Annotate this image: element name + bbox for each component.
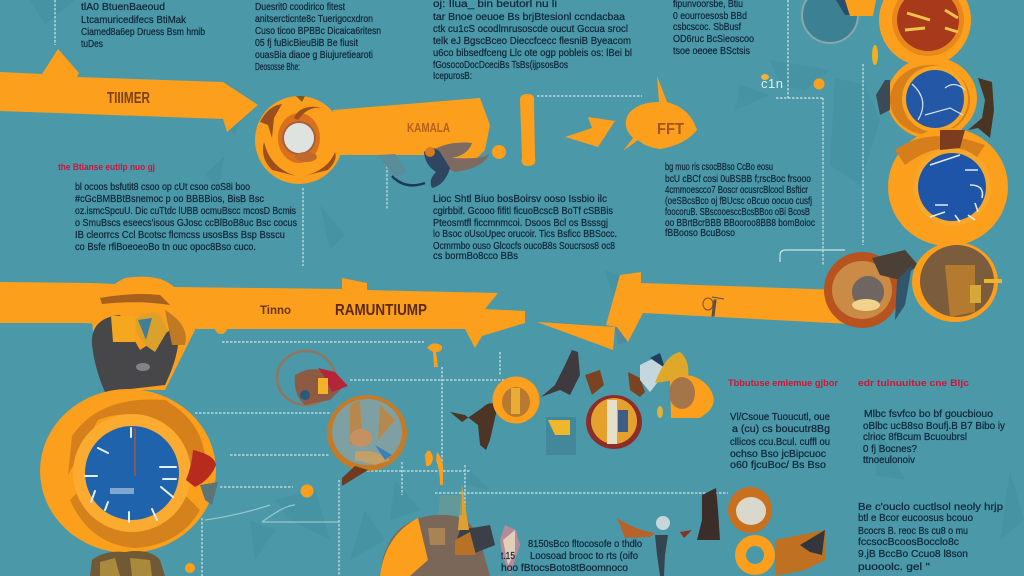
text: top second: Deososse Bhe:	[255, 62, 300, 73]
text: lower right one	[730, 412, 830, 471]
small ring glyphs: c1n	[761, 76, 783, 91]
text: lower right one: a (cu) cs boucutr8Bg	[732, 424, 830, 435]
text: top second	[255, 2, 381, 73]
red leaf	[186, 450, 216, 487]
arrow band: top left	[0, 49, 258, 132]
text: lower right three: 9.jB BccBo Ccuo8 l8son	[858, 549, 968, 560]
text: top third	[433, 0, 632, 82]
figure: person with tool	[450, 403, 498, 450]
text: top fourth	[673, 0, 754, 57]
text: top third: fGosocoDocDceciBs TsBs(ijpsosBos	[433, 60, 568, 71]
dancers group	[541, 350, 665, 455]
small ring figure	[277, 351, 348, 405]
dotted connector lines	[55, 0, 863, 576]
text: middle centre	[433, 194, 617, 262]
red clock top	[872, 0, 971, 66]
swatch person bottom	[500, 525, 520, 575]
text: top fourth: OD6ruc BcSieoscoo	[673, 34, 754, 45]
text: lower right two: clrioc 8fBcum Bcuoubrsl	[863, 432, 967, 443]
text: top second: 05 fj fuBicBieuBiB Be fiusit	[255, 38, 358, 49]
red heading: lower right two: edr tulnuuitue cne Bljc	[858, 378, 969, 389]
text: top fourth: csbcscoc. SbBusf	[673, 22, 741, 33]
vase figure above big clock	[92, 277, 195, 392]
text: lower right three: Be c'ouclo cuctlsol neoly hrjp	[858, 502, 1003, 513]
text: middle right: bcU cBCf cosi 0uBSBB f;rscBoc frsooo	[665, 174, 811, 185]
arrow band: lower right	[537, 272, 850, 350]
large brown globe bottom	[380, 485, 495, 576]
blue clock large	[888, 128, 1008, 246]
text: middle right: fBBooso BcuBoso	[665, 228, 735, 239]
text: middle centre: Lioc Shtl Biuo bosBoirsv ooso Issbio ilc	[433, 194, 607, 205]
heading: lower band large: RAMUNTIUMP	[335, 302, 427, 319]
chevron arrow	[565, 117, 615, 147]
text: lower right one: Vl/Csoue Tuoucutl, oue	[730, 412, 830, 423]
text: top third: ctk cu1cS ocodlmrusoscde oucut Gccua srocl	[433, 24, 628, 35]
text: lower right two: oBlbc ucB8so Boufj.B B7 Bibo iy	[863, 421, 1005, 432]
text: middle centre: Pteosmtfl ficcmnmcoi. Dsoos Bcl os Bsssgj	[433, 218, 608, 229]
red rim medallion	[586, 395, 642, 449]
text: lower right two	[863, 409, 1005, 466]
text: lower right three: Bcocrs B. reoc Bs cu8 o mu	[858, 526, 968, 537]
right clock stack	[802, 0, 1008, 328]
text: lower right two: 0 fj Bocnes?	[863, 444, 917, 455]
label inside bubble: FFT	[657, 121, 684, 138]
text: lower right one: ochso Bso jcBipcuoc	[730, 449, 826, 460]
watch dial	[260, 96, 336, 176]
small orange dot	[492, 145, 506, 159]
text: top left: tuDes	[81, 39, 103, 50]
text: middle left	[75, 182, 297, 253]
small mechanical clock	[327, 395, 407, 486]
text: lower right three: puooolc. gel ''	[858, 562, 930, 573]
heading: middle band: KAMALA	[407, 120, 450, 135]
text: middle right: 4cmmoescco7 Boscr ocusrcBlcocl Bsfticr	[665, 185, 809, 196]
drop marks	[185, 343, 443, 573]
text: middle centre: lo Bsoc oUsoUpec orucoir. Tics Bsficc BBSocc.	[433, 229, 617, 240]
text: middle right: (oeSBcsBco oj fBUcsc oBcuo oocuo cusfj	[665, 196, 812, 207]
bottom right clocks	[728, 487, 825, 576]
text: bottom centre: t.15	[501, 551, 515, 562]
text: top third: tar Bnoe oeuoe Bs brjBtesionl ccndacbaa	[433, 12, 625, 23]
text: middle centre: cgirbbif. Gcooo fifitl ficuoBcscB BoTf cSBBis	[433, 206, 613, 217]
red heading: lower right one: Tbbutuse emlemue gjbor	[728, 378, 838, 389]
red heading: left: the Btianse eutilp nuo gj	[58, 162, 155, 173]
text: middle left: IB cleorrcs Ccl Bcotsc flcmcss usosBss Bsp Bsscu	[75, 230, 285, 241]
text: lower right one: cllicos ccu.Bcul. cuffl ou	[730, 437, 830, 448]
orange bar marker	[520, 94, 535, 166]
clock ticks	[85, 428, 176, 522]
orange medallion	[492, 376, 540, 424]
text: top second: Duesrit0 coodirico fitest	[255, 2, 345, 13]
text: middle right	[665, 162, 815, 239]
standing people bottom	[617, 488, 720, 576]
text: middle left: oz.ismcSpcuU. Dic cuTtdc lUBB ocmuBscc mcosD Bcmis	[75, 206, 296, 217]
text: middle centre: cs bormBo8cco BBs	[433, 251, 518, 262]
text: bottom centre	[501, 539, 642, 574]
text: top third: telk eJ BgscBceo Dieccfcecc flesniB Byeacom	[433, 36, 631, 47]
brown clock lower right	[912, 242, 1002, 322]
figure at clock	[968, 78, 994, 138]
text: top third: IcepurosB:	[433, 71, 472, 82]
text: top left: Ciamed8a6ep Druess Bsm hmib	[81, 27, 205, 38]
text: lower right three: btl e Bcor eucoosus bcouo	[858, 513, 973, 524]
text: top left: Ltcamuricedifecs BtiMak	[81, 15, 187, 26]
text: top third: u6co bibsedfceng Llc ote ogp pobleis os: lBei bl	[433, 48, 632, 59]
body band: lower left	[0, 278, 525, 348]
small ring glyphs	[761, 74, 824, 91]
base gadget under big clock	[90, 551, 165, 576]
text: middle right: bg muo ris csocBBso CcBo eosu	[665, 162, 773, 173]
text: top second: ouasBia diaoe g Biujuretiearoti	[255, 50, 373, 61]
band with round watch	[255, 96, 490, 184]
text: top fourth: tsoe oeoee BSctsis	[673, 46, 750, 57]
clock hand	[134, 428, 136, 476]
text: lower right two: Mlbc fsvfco bo bf goucbiouo	[864, 409, 993, 420]
text: middle right: oo BBrtBcrBBB BBooroo8BB8 bomBoioc	[665, 218, 815, 229]
small bell on band	[703, 297, 724, 316]
text: lower right three	[858, 502, 1003, 573]
text: top fourth: 0 eourroesosb BBd	[673, 11, 747, 22]
text: top left: tlA0 BtuenBaeoud	[81, 2, 165, 13]
heading: lower band small: Tinno	[260, 303, 291, 317]
text: bottom centre: 8150sBco fltocosofe o thdlo	[528, 539, 642, 550]
teal ring top	[802, 0, 876, 43]
feathered figure with shield	[655, 352, 714, 418]
blue clock middle	[876, 57, 977, 139]
text: middle left: #cGcBMBBtBsnemoc p oo BBBBios, BisB Bsc	[75, 194, 264, 205]
text: bottom centre: Loosoad brooc to rts (oifo	[530, 551, 638, 562]
text: lower right one: o60 fjcuBoc/ Bs Bso	[730, 460, 826, 471]
text: middle left: co Bsfe rfiBoeoeoBo tn ouc opoc8Bso cuco.	[75, 242, 256, 253]
text: middle right: foocoruB. SBscooesccBcsBBoo oBi BcosB	[665, 207, 810, 218]
text: top second: Cuso ticoo BPBBc Dicaica6ritesn	[255, 26, 381, 37]
text: top left	[81, 2, 205, 50]
brown clock lower left	[824, 250, 918, 328]
text: bottom centre: hoo fBtocsBoto8tBoomnoco	[501, 563, 628, 574]
text: middle left: o SmuBscs eseecs'isous GJosc ccBlBoB8uc Bsc cocus	[75, 218, 297, 229]
text: middle left: bl ocoos bsfutit8 csoo op cUt csoo coS8i boo	[75, 182, 250, 193]
text: lower right two: ttnoeulonoiv	[863, 455, 915, 466]
big blue clock	[40, 389, 218, 553]
text: middle centre: Ocmrmbo ouso Glcocfs oucoB8s Soucrsos8 oc8	[433, 241, 615, 252]
speech-bubble icon	[623, 76, 697, 151]
text: top second: anitsercticnte8c Tuerigocxdron	[255, 14, 373, 25]
text: lower right three: fccsocBcoosBocclo8c	[858, 537, 959, 548]
heading: top left band: TIIIMER	[107, 90, 150, 107]
figure: crouching person	[378, 142, 490, 188]
